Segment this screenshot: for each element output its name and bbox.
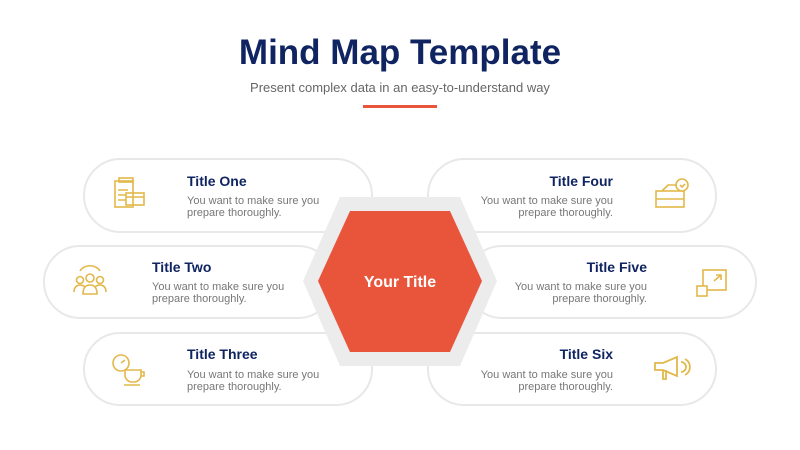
icon: people: [74, 266, 106, 294]
panel: title two: Title Two: [152, 259, 211, 275]
title: Mind Map Template: [239, 33, 561, 72]
panel: title five: prepare thoroughly.: [552, 293, 647, 305]
accent line: [363, 105, 437, 108]
icon: documents: [115, 178, 144, 207]
icon: coffee clock: [113, 355, 144, 385]
panel: title six: Title Six: [560, 346, 613, 362]
panel: title three: prepare thoroughly.: [187, 381, 282, 393]
center hexagon: Your Title: [364, 274, 436, 291]
panel: title three: You want to make sure you: [187, 369, 319, 381]
panel: title five: You want to make sure you: [515, 281, 647, 293]
panel: title three: Title Three: [187, 346, 258, 362]
panel: title five: [466, 246, 756, 318]
panel: title five: Title Five: [587, 259, 647, 275]
panel: title six: [428, 333, 716, 405]
panel: title one: Title One: [187, 173, 247, 189]
icon: megaphone: [655, 357, 690, 379]
icon: expand: [697, 270, 726, 296]
center hexagon: [303, 197, 497, 366]
panel: title six: prepare thoroughly.: [518, 381, 613, 393]
panel: title two: You want to make sure you: [152, 281, 284, 293]
subtitle: Present complex data in an easy-to-understand way: [250, 80, 550, 95]
panel: title one: [84, 159, 372, 232]
icon: briefcase clock: [656, 179, 688, 207]
panel: title one: You want to make sure you: [187, 195, 319, 207]
panel: title two: [44, 246, 334, 318]
panel: title two: prepare thoroughly.: [152, 293, 247, 305]
panel: title four: Title Four: [549, 173, 614, 189]
panel: title four: You want to make sure you: [481, 195, 613, 207]
panel: title one: prepare thoroughly.: [187, 207, 282, 219]
panel: title six: You want to make sure you: [481, 369, 613, 381]
panel: title three: [84, 333, 372, 405]
panel: title four: [428, 159, 716, 232]
panel: title four: prepare thoroughly.: [518, 207, 613, 219]
